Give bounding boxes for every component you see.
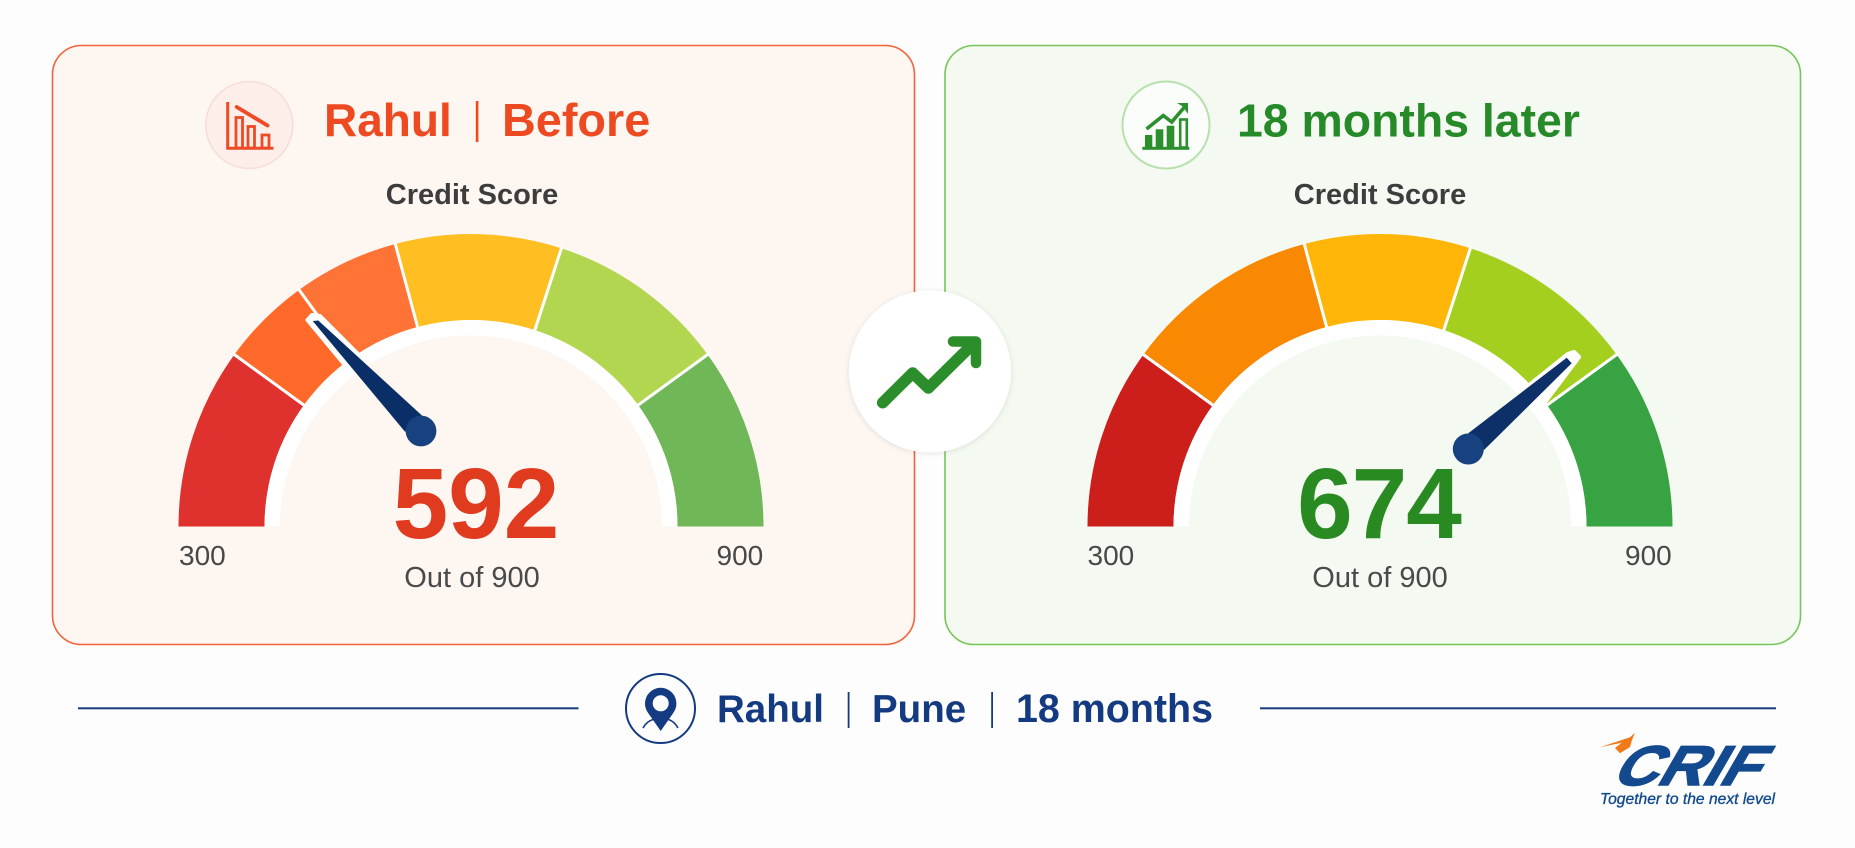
label: 300: 300 [1088,540,1134,571]
needle: before [308,315,436,446]
divider line left [78,707,578,709]
score: 674: 674 [1297,448,1462,560]
needle: after [1453,352,1578,464]
icon: falling bar chart [206,82,293,168]
caption: Rahul Pune 18 months: 18 months [1016,687,1213,731]
label: credit score: Credit Score [386,179,558,211]
label: out of 900: Out of 900 [404,562,540,594]
score: 592: 592 [393,448,559,560]
label: 900: 900 [716,540,763,571]
heading: Rahul Before [324,94,650,146]
logo: CRIF: CRIF [1603,734,1784,797]
heading: 18 months later: 18 months later [1237,94,1580,146]
label: 300: 300 [179,540,226,571]
icon: rising bar chart [1122,82,1210,168]
heading: Rahul Before: Rahul [324,94,452,146]
divider line right [1260,707,1776,709]
caption: Rahul Pune 18 months: Rahul [717,688,824,731]
badge: trend arrow [849,290,1011,452]
label: 900: 900 [1625,540,1672,571]
gauge: before [178,234,764,526]
logo: CRIF: Together to the next level [1600,791,1775,808]
gauge: after [1088,234,1672,526]
panel: before [52,46,914,644]
caption: Rahul Pune 18 months: Pune [872,688,966,731]
label: credit score: Credit Score [1294,179,1466,211]
label: out of 900: Out of 900 [1312,562,1448,594]
panel: 18 months later [945,46,1800,644]
icon: location pin [626,674,695,743]
heading: Rahul Before: Before [502,94,650,146]
caption: Rahul Pune 18 months [717,687,1213,731]
